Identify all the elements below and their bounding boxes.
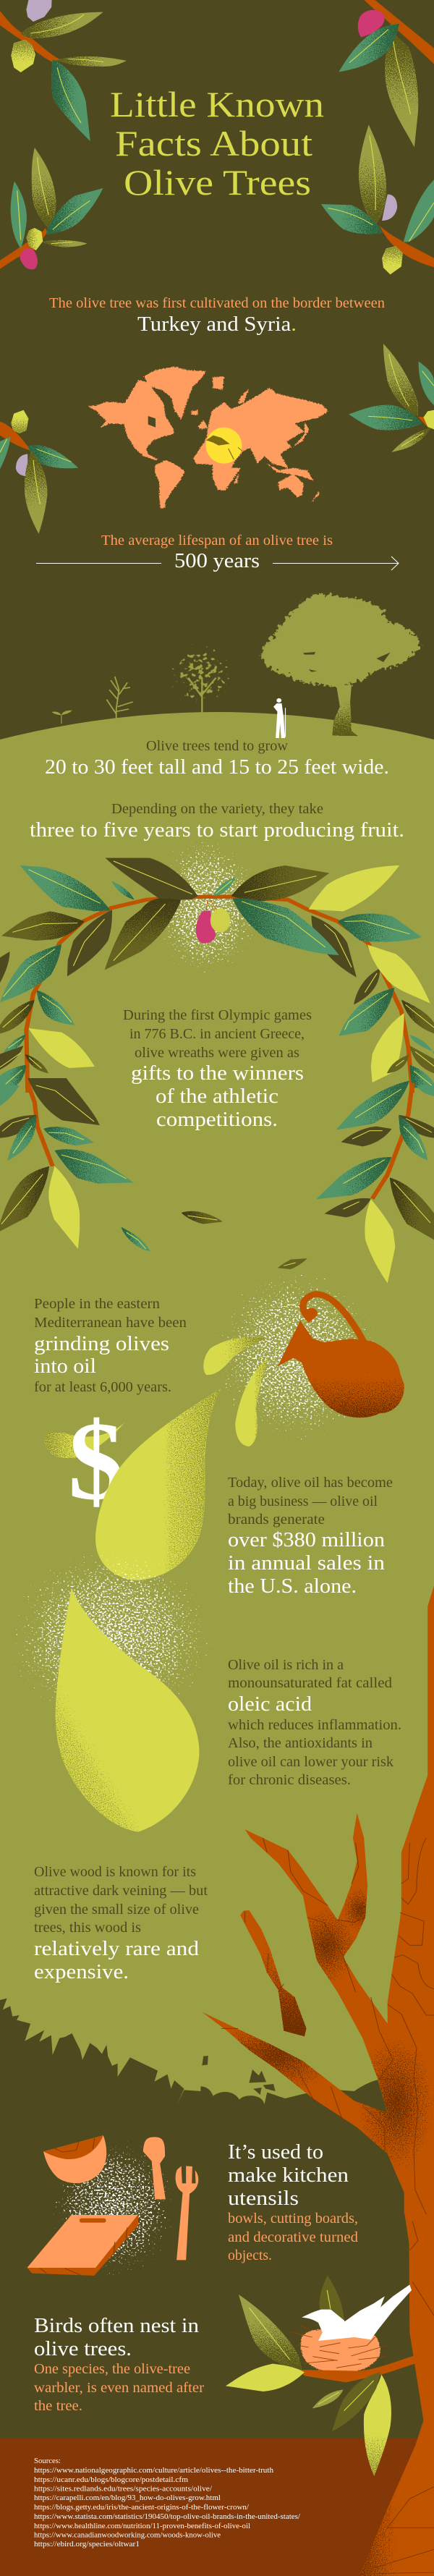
wreath leaves: lower left: [0, 1078, 134, 1249]
fact: time to produce fruit: [30, 801, 404, 842]
white speckle: [51, 2137, 176, 2277]
fact: olive wood: relatively rare and: [34, 1937, 200, 1960]
fact: olive oil sales: Today, olive oil has become: [228, 1475, 393, 1491]
sources list: https://www.healthline.com/nutrition/11-proven-benefits-of-olive-oil: [34, 2522, 250, 2530]
fact: kitchen utensils: [228, 2140, 358, 2263]
wreath leaves: left: [0, 858, 198, 1085]
sources list: https://www.nationalgeographic.com/culture/article/olives--the-bitter-truth: [34, 2467, 274, 2475]
floating tree branch: [240, 1910, 307, 2036]
fact: oil grinding history: into oil: [34, 1355, 96, 1378]
fact: oleic acid: oleic acid: [228, 1692, 312, 1716]
sources list: https://blogs.getty.edu/iris/the-ancient-origins-of-the-flower-crown/: [34, 2504, 249, 2512]
fact: birds nesting: Birds often nest in: [34, 2314, 200, 2337]
title: Little Known: [110, 84, 324, 124]
sources list: https://carapelli.com/en/blog/93_how-do-olives-grow.html: [34, 2494, 221, 2502]
fact: olive wood: given the small size of olive: [34, 1902, 199, 1918]
fact: origin of the olive tree: [49, 295, 385, 336]
icon: wooden bowl: [43, 2135, 106, 2183]
branch: top left: [0, 0, 127, 141]
green hillside background: [0, 712, 434, 2135]
fact: olive oil sales: in annual sales in: [228, 1551, 386, 1575]
fact: oil grinding history: [34, 1296, 187, 1395]
fact: olive wood: Olive wood is known for its: [34, 1864, 196, 1880]
icon: nest: [292, 2325, 386, 2373]
hanging olives: [196, 899, 230, 944]
white speckle: [215, 1268, 380, 1442]
fact: oil grinding history: grinding olives: [34, 1332, 169, 1355]
branch: lower left: [0, 148, 103, 269]
sources list: https://www.statista.com/statistics/190450/top-olive-oil-brands-in-the-united-states/: [34, 2513, 300, 2521]
branch: left side: [0, 410, 78, 534]
fact: lifespan of an olive tree: The average lifespan of an olive tree is: [101, 533, 333, 548]
illustration: header olive branches: [0, 0, 434, 274]
white speckle: [8, 1548, 213, 1727]
fact: olive oil sales: the U.S. alone.: [228, 1575, 357, 1598]
fact: olive wood: expensive.: [34, 1960, 129, 1983]
fact: oleic acid: [228, 1657, 401, 1788]
fact: tree height and width: [45, 738, 389, 779]
icon: cutting board: [27, 2215, 138, 2276]
fact: lifespan of an olive tree: 500 years: [174, 549, 260, 572]
fact: oil grinding history: for at least 6,000 years.: [34, 1379, 171, 1395]
wreath leaves: right: [213, 865, 434, 1088]
fact: olive wood: attractive dark veining — but: [34, 1883, 208, 1899]
fact: olympic wreaths: [123, 1007, 312, 1131]
young tree: [168, 643, 234, 724]
wreath leaves: lower right: [316, 1080, 434, 1283]
fact: kitchen utensils: and decorative turned: [228, 2229, 358, 2245]
branch: right side: [349, 344, 434, 452]
large oil drop: [56, 1588, 200, 1832]
fact: kitchen utensils: objects.: [228, 2247, 272, 2263]
fact: oleic acid: monounsaturated fat called: [228, 1675, 392, 1691]
oil splashes: [45, 1337, 270, 1458]
icon: wooden spoon: [143, 2137, 166, 2199]
fact: olympic wreaths: During the first Olympic games: [123, 1007, 312, 1023]
fact: tree height and width: 20 to 30 feet tall and 15 to 25 feet wide.: [45, 755, 389, 779]
title: Olive Trees: [124, 162, 311, 203]
title: [110, 84, 324, 203]
fact: oleic acid: olive oil can lower your risk: [228, 1754, 393, 1770]
fact: olympic wreaths: competitions.: [156, 1108, 278, 1131]
footer band: [0, 2438, 434, 2576]
fact: olympic wreaths: olive wreaths were given as: [135, 1045, 299, 1061]
seedling: [52, 711, 72, 724]
sources list: https://ebird.org/species/oltwar1: [34, 2541, 140, 2549]
fact: kitchen utensils: make kitchen: [228, 2164, 349, 2187]
fact: birds nesting: warbler, is even named after: [34, 2380, 204, 2396]
illustration: oil drops: [95, 1389, 221, 1580]
fact: origin of the olive tree: Turkey and Syria .: [137, 313, 297, 336]
wreath branch lower: [27, 1083, 412, 1199]
illustration: tree canopy and trunk: [0, 1586, 434, 2275]
icon: oil pitcher: [278, 1294, 404, 1418]
nest leaves: [226, 2275, 391, 2476]
white speckle: [151, 837, 262, 977]
world map: [88, 367, 328, 509]
fact: birds nesting: One species, the olive-tree: [34, 2361, 190, 2377]
fact: lifespan of an olive tree: [101, 533, 333, 572]
fact: olympic wreaths: in 776 B.C. in ancient Greece,: [129, 1026, 305, 1042]
fact: time to produce fruit: three to five years to start producing fruit.: [30, 818, 404, 842]
fact: kitchen utensils: bowls, cutting boards,: [228, 2211, 358, 2227]
branch: top right: [339, 0, 434, 147]
fact: oil grinding history: People in the eastern: [34, 1296, 160, 1312]
illustration: trunk, board and bird nest: [27, 2214, 434, 2576]
dark tree canopy: [0, 1999, 434, 2438]
fact: olympic wreaths: of the athletic: [156, 1085, 278, 1108]
fact: olive wood: trees, this wood is: [34, 1920, 141, 1936]
sources list: https://www.canadianwoodworking.com/woods-know-olive: [34, 2531, 221, 2540]
large drop with dollar: [95, 1389, 221, 1580]
fact: oleic acid: Olive oil is rich in a: [228, 1657, 344, 1673]
title: Facts About: [115, 123, 312, 164]
fact: oil grinding history: Mediterranean have been: [34, 1315, 187, 1331]
fact: oleic acid: Also, the antioxidants in: [228, 1735, 373, 1751]
sources list: Sources:: [34, 2457, 61, 2465]
arrow: lifespan timeline: [36, 556, 399, 570]
icon: wooden fork: [176, 2166, 198, 2260]
fact: olive oil sales: over $380 million: [228, 1528, 386, 1551]
person silhouette: [273, 698, 286, 738]
fact: time to produce fruit: Depending on the variety, they take: [111, 801, 323, 817]
sources list: https://sites.redlands.edu/trees/species-accounts/olive/: [34, 2485, 212, 2494]
illustration: olive wreath bottom and falling leaves: [0, 1078, 434, 1458]
illustration: olive wreath top: [0, 837, 434, 1093]
nest branch: [299, 2355, 415, 2382]
fact: birds nesting: olive trees.: [34, 2337, 132, 2360]
illustration: tree growth stages on the hill: [52, 593, 420, 738]
fact: kitchen utensils: utensils: [228, 2187, 299, 2210]
wreath branch: [26, 897, 412, 1093]
fact: oleic acid: for chronic diseases.: [228, 1772, 351, 1788]
fact: olive oil sales: brands generate: [228, 1512, 325, 1528]
mature tree: [262, 593, 420, 736]
fact: origin of the olive tree: The olive tree was first cultivated on the border between: [49, 295, 385, 311]
icon: dollar sign: $: [68, 1399, 124, 1523]
tree trunk and branches: [188, 1586, 434, 2214]
fact: birds nesting: [34, 2314, 204, 2414]
fact: tree height and width: Olive trees tend to grow: [146, 738, 289, 754]
tree trunk lower: [359, 2214, 434, 2576]
fact: olympic wreaths: gifts to the winners: [131, 1062, 304, 1085]
fact: kitchen utensils: It’s used to: [228, 2140, 323, 2164]
sources list: https://ucanr.edu/blogs/blogcore/postdetail.cfm: [34, 2476, 188, 2484]
fact: oleic acid: which reduces inflammation.: [228, 1717, 401, 1733]
falling leaves: [121, 1211, 307, 1269]
young sapling: [106, 677, 133, 726]
sources list: [34, 2457, 300, 2549]
illustration: middle olive branches and world map: [0, 344, 434, 534]
icon: bird: [302, 2284, 412, 2341]
fact: olive oil sales: [228, 1475, 393, 1598]
fact: birds nesting: the tree.: [34, 2398, 82, 2414]
fact: olive oil sales: a big business — olive oil: [228, 1494, 378, 1509]
branch: lower right: [321, 124, 434, 274]
fact: olive wood: [34, 1864, 208, 1983]
